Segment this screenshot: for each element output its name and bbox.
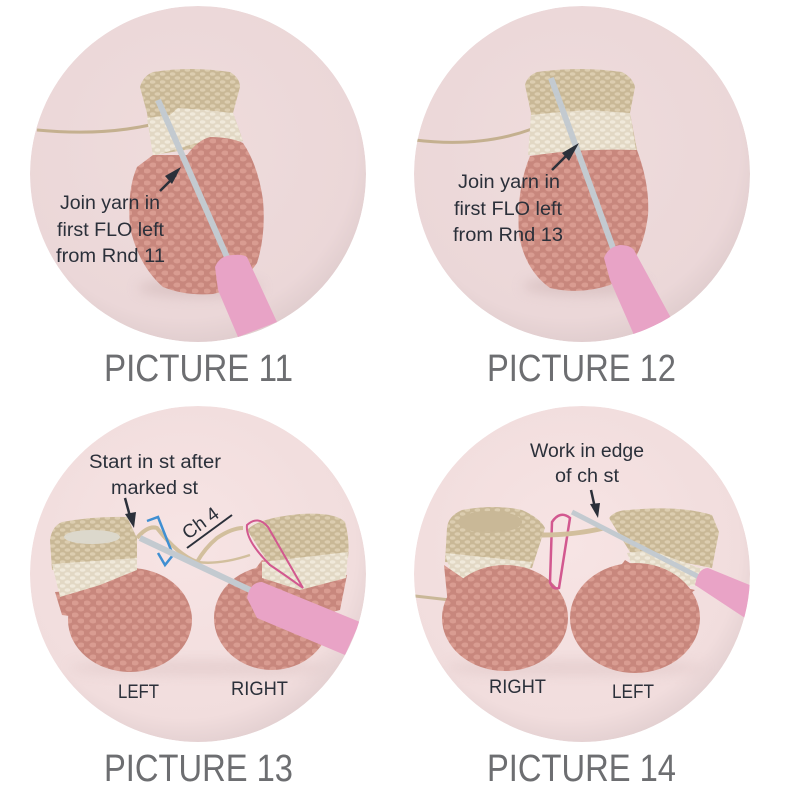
annotation arrow (552, 143, 579, 170)
annotation text: of ch st (555, 466, 620, 487)
annotation text (530, 441, 644, 487)
annotation text (453, 172, 563, 246)
photo circle 12 (414, 6, 750, 342)
panel: picture 12 (414, 6, 750, 390)
photo circle 13 (30, 406, 366, 742)
label: right: RIGHT (231, 679, 288, 700)
panel: picture 11 (30, 6, 366, 390)
annotation text (56, 193, 165, 267)
annotation: start (89, 452, 222, 499)
annotation text: from Rnd 11 (56, 246, 165, 267)
annotation: ch 4: Ch 4 (179, 503, 224, 544)
annotation arrow (125, 498, 136, 528)
label: left: LEFT (612, 682, 654, 703)
annotation: start: Start in st after (89, 452, 222, 473)
annotation arrow (590, 490, 600, 518)
photo circle 14 (414, 406, 752, 742)
annotation text: Work in edge (530, 441, 644, 462)
annotation text: Join yarn in (458, 172, 560, 193)
annotation arrow (160, 167, 181, 191)
caption: PICTURE 13 (104, 748, 293, 790)
annotation text: first FLO left (57, 220, 165, 241)
caption: PICTURE 11 (104, 348, 293, 390)
caption: PICTURE 12 (487, 348, 676, 390)
label: left: LEFT (118, 682, 159, 703)
panel: picture 14 (414, 406, 752, 790)
annotation text: Join yarn in (60, 193, 160, 214)
caption: PICTURE 14 (487, 748, 676, 790)
label: right: RIGHT (489, 677, 546, 698)
annotation text: first FLO left (454, 199, 563, 220)
annotation text: from Rnd 13 (453, 225, 563, 246)
annotation: start: marked st (111, 478, 199, 499)
photo circle 11 (30, 6, 366, 342)
ch 4 line (187, 515, 232, 548)
panel: picture 13 (30, 406, 366, 790)
